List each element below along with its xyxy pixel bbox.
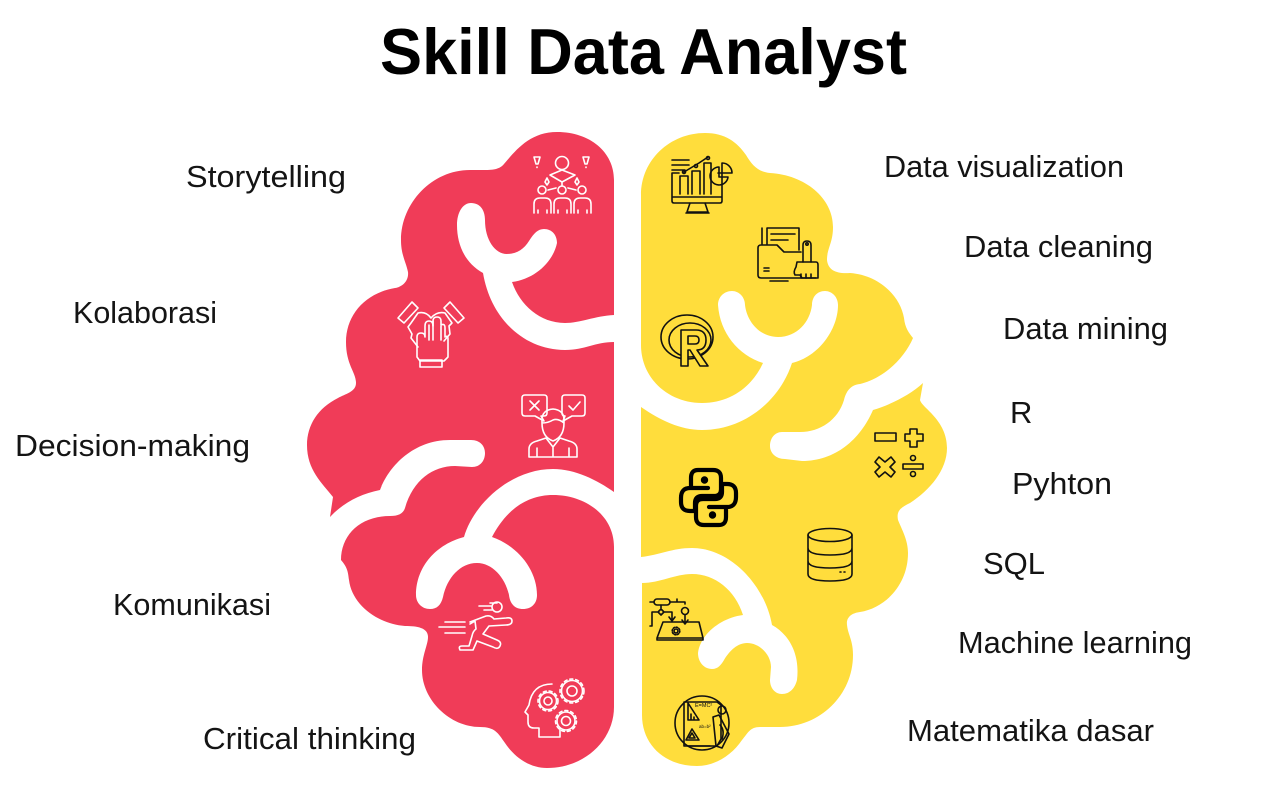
- icon: collaboration hands: [398, 302, 464, 367]
- label: Kolaborasi: Kolaborasi: [73, 295, 217, 330]
- label: SQL: SQL: [983, 546, 1045, 581]
- label: Data mining: Data mining: [1003, 311, 1168, 346]
- icon: math operators: [875, 429, 923, 477]
- label: Machine learning: Machine learning: [958, 625, 1192, 660]
- label: Critical thinking: Critical thinking: [203, 721, 416, 756]
- label: R: R: [1010, 395, 1032, 430]
- icon: critical thinking head with gears: [525, 679, 584, 737]
- right brain shape: [641, 133, 947, 766]
- icon: data cleaning folder and brush: [758, 228, 818, 281]
- icon: basic mathematics sheet: E=MC²: [695, 703, 712, 709]
- labels: soft skills: [15, 159, 416, 756]
- label: Komunikasi: Komunikasi: [113, 587, 271, 622]
- label: Data visualization: Data visualization: [884, 149, 1124, 184]
- label: Pyhton: Pyhton: [1012, 466, 1112, 501]
- left brain shape: [307, 132, 614, 768]
- label: Data cleaning: Data cleaning: [964, 229, 1153, 264]
- icon: python logo: [681, 470, 736, 525]
- icon: R language logo: [661, 315, 713, 366]
- icon: SQL database: [808, 528, 852, 581]
- labels: technical skills: [884, 149, 1192, 748]
- icon: basic mathematics sheet: [675, 696, 729, 750]
- icon: storytelling audience: [534, 156, 591, 213]
- icon: basic mathematics sheet: ab=b²: [699, 724, 711, 729]
- panel: right brain hemisphere (technical skills): [641, 133, 947, 766]
- icon: machine learning flow and laptop: [650, 599, 703, 640]
- label: Storytelling: Storytelling: [186, 159, 346, 194]
- icon: running person: [439, 602, 512, 650]
- icon: data visualization monitor chart: [672, 156, 732, 213]
- panel: left brain hemisphere (soft skills): [307, 132, 614, 768]
- icon: decision making person: [522, 395, 585, 457]
- label: Matematika dasar: Matematika dasar: [907, 713, 1154, 748]
- title: Skill Data Analyst: [380, 15, 907, 88]
- label: Decision-making: Decision-making: [15, 428, 250, 463]
